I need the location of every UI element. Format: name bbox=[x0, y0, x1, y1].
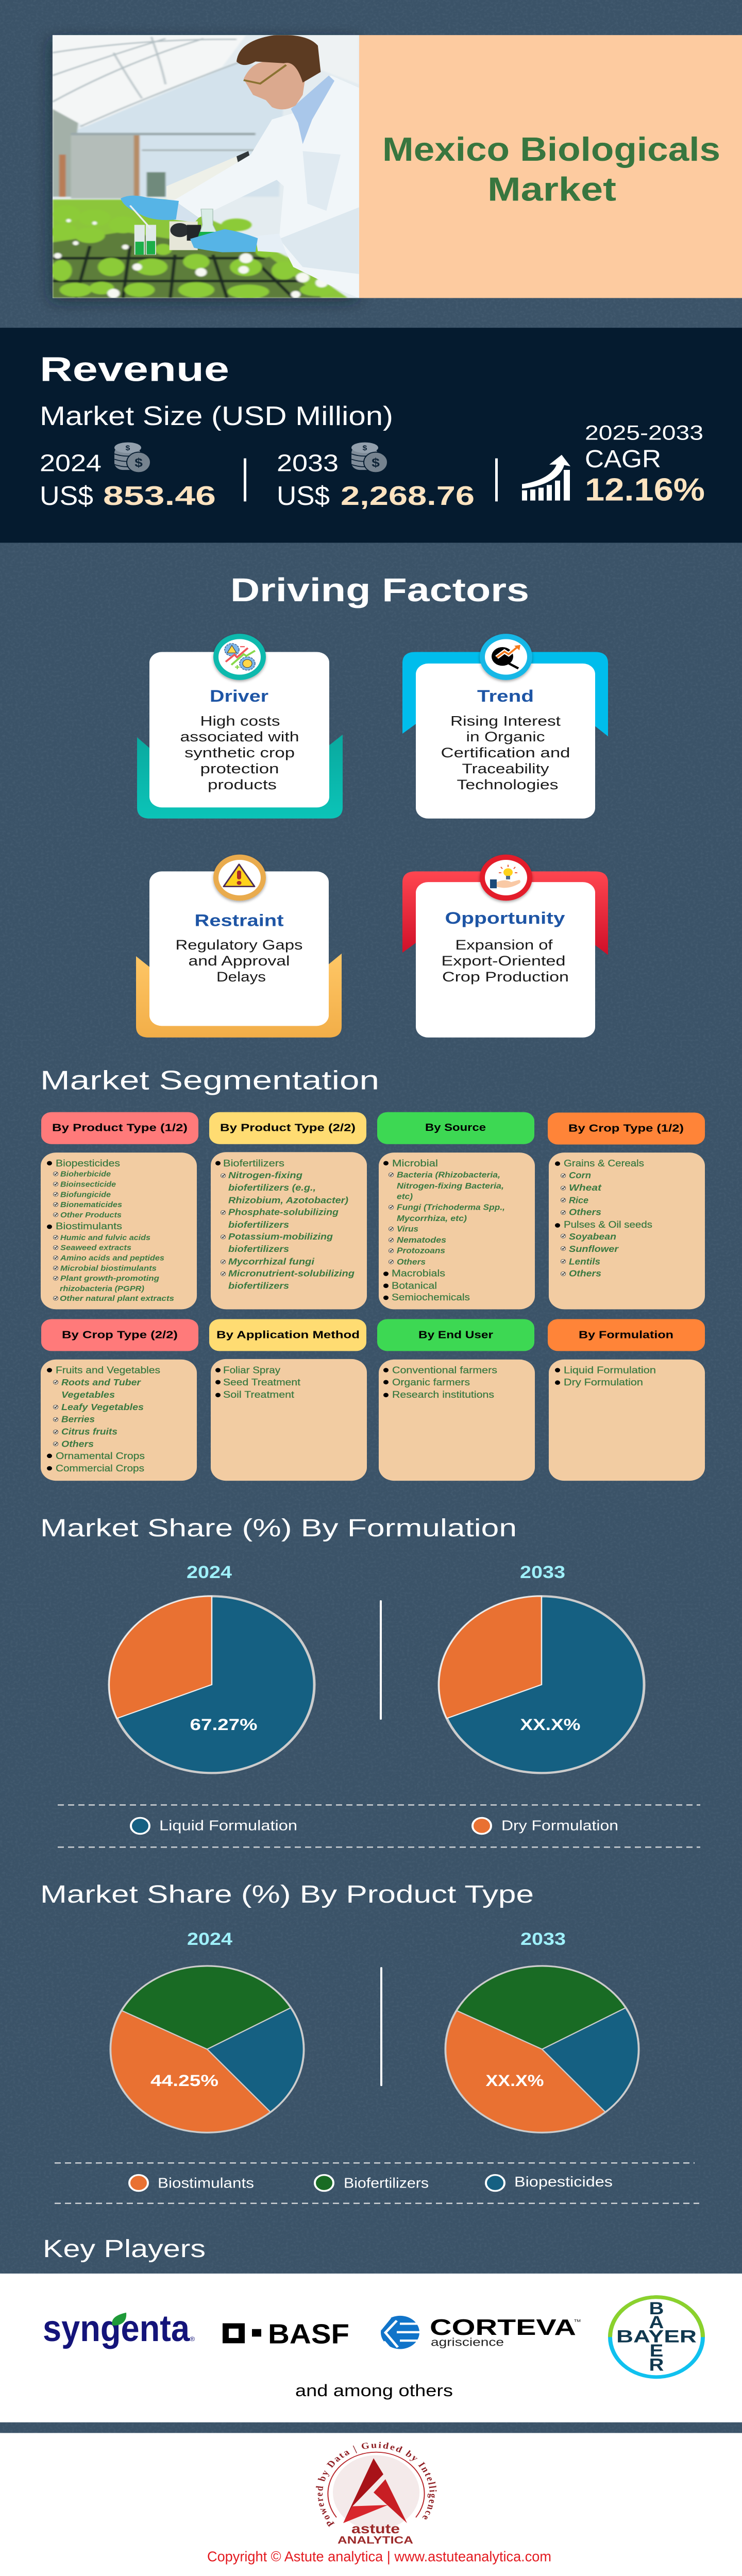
segment list: Ornamental Crops bbox=[56, 1451, 145, 1462]
2033 value: 2,268.76 bbox=[341, 481, 475, 511]
legend item: liquid: Liquid Formulation bbox=[159, 1818, 297, 1834]
icon: trend bbox=[480, 634, 532, 680]
segment list: Seaweed extracts bbox=[60, 1244, 131, 1252]
card text: Crop Production bbox=[442, 970, 569, 985]
card heading: Trend bbox=[477, 687, 534, 705]
segment list: Phosphate-solubilizing bbox=[228, 1207, 339, 1217]
pie chart: product type 2024 bbox=[111, 1929, 303, 2132]
CAGR: 12.16% bbox=[585, 472, 705, 507]
segment header: By Source bbox=[425, 1121, 486, 1133]
heading: key players: Key Players bbox=[43, 2235, 206, 2263]
segment: by product type 2/2 bbox=[209, 1112, 367, 1309]
segment header bbox=[209, 1319, 366, 1351]
segment header bbox=[377, 1319, 534, 1351]
segment list: Berries bbox=[61, 1414, 95, 1424]
segment list: Other Products bbox=[60, 1211, 122, 1219]
microscope bbox=[166, 156, 241, 199]
segment: by formulation bbox=[548, 1319, 705, 1481]
logo: corteva: CORTEVA bbox=[430, 2315, 576, 2340]
card text: Delays bbox=[216, 970, 266, 985]
segment list: Microbial biostimulants bbox=[60, 1264, 157, 1273]
segment: by end user bbox=[377, 1319, 535, 1481]
title: Market bbox=[487, 171, 616, 208]
segment list: Vegetables bbox=[61, 1389, 115, 1400]
CAGR bbox=[585, 421, 705, 507]
segment list: Nematodes bbox=[397, 1235, 446, 1245]
hero photo: scientist in greenhouse bbox=[50, 35, 359, 299]
segment header bbox=[209, 1112, 366, 1144]
segment list: Other natural plant extracts bbox=[60, 1295, 174, 1303]
test tubes and flask bbox=[134, 225, 145, 255]
logo: BASF: BASF bbox=[268, 2319, 349, 2349]
segment list: Grains & Cereals bbox=[564, 1158, 644, 1168]
segment list: Bioherbicide bbox=[60, 1171, 111, 1178]
year label: 2024 bbox=[187, 1562, 232, 1582]
segment list: Corn bbox=[569, 1170, 591, 1180]
segment header: By Crop Type (1/2) bbox=[568, 1122, 684, 1134]
segment header: By End User bbox=[418, 1329, 493, 1341]
logo: astute analytica: Powered by Data | Guided by Intelligence bbox=[315, 2442, 437, 2527]
legend item: biostimulants: Biostimulants bbox=[158, 2176, 254, 2191]
segment list: Others bbox=[397, 1257, 426, 1266]
segment list: Rice bbox=[569, 1195, 588, 1205]
segment list: Leafy Vegetables bbox=[61, 1402, 144, 1412]
icon: restraint bbox=[213, 855, 266, 901]
card text: Expansion of bbox=[456, 938, 553, 953]
divider bbox=[380, 1600, 382, 1720]
segment: by application method bbox=[209, 1319, 367, 1481]
segment list: Biostimulants bbox=[56, 1222, 122, 1232]
segment list bbox=[549, 1360, 705, 1481]
2033 value: US$ bbox=[277, 481, 330, 511]
key players band bbox=[0, 2274, 742, 2422]
card text bbox=[442, 938, 569, 985]
segment list: Semiochemicals bbox=[392, 1292, 470, 1303]
segment list bbox=[41, 1153, 197, 1309]
2024 value: US$ bbox=[40, 481, 93, 511]
copyright: Copyright © Astute analytica | www.astuteanalytica.com bbox=[207, 2549, 551, 2565]
legend item: dry: Dry Formulation bbox=[501, 1818, 618, 1834]
segment list: Wheat bbox=[569, 1183, 602, 1193]
segment list bbox=[211, 1359, 367, 1481]
legend: product type bbox=[55, 2163, 699, 2204]
heading: driving factors: Driving Factors bbox=[230, 571, 529, 608]
heading: market segmentation: Market Segmentation bbox=[40, 1065, 379, 1095]
card text: High costs bbox=[200, 714, 280, 729]
segment list: rhizobacteria (PGPR) bbox=[60, 1285, 144, 1293]
segment list: Bionematicides bbox=[60, 1201, 122, 1209]
card: opportunity bbox=[402, 855, 608, 1038]
segment header: By Crop Type (2/2) bbox=[62, 1329, 178, 1341]
segment: by product type 1/2 bbox=[41, 1112, 198, 1309]
card text bbox=[180, 714, 299, 792]
icon: coins 2033: $ bbox=[363, 444, 367, 452]
segment: by source bbox=[377, 1112, 535, 1309]
segment header: By Product Type (1/2) bbox=[52, 1122, 188, 1133]
card text: Export-Oriented bbox=[442, 954, 566, 969]
segment list: Microbial bbox=[392, 1158, 438, 1168]
segment list: Macrobials bbox=[392, 1268, 445, 1279]
market size label: Market Size (USD Million) bbox=[40, 401, 393, 431]
segment list: Conventional farmers bbox=[392, 1365, 497, 1376]
card text: protection bbox=[200, 761, 279, 776]
segment list: Pulses & Oil seeds bbox=[564, 1219, 652, 1230]
heading: market share by formulation: Market Share (%) By Formulation bbox=[40, 1514, 517, 1542]
segment list: Liquid Formulation bbox=[564, 1365, 656, 1376]
plant beds bbox=[53, 199, 348, 298]
pie chart: product type 2033 bbox=[446, 1929, 638, 2132]
segment list bbox=[549, 1153, 705, 1309]
icon: opportunity bbox=[480, 855, 532, 901]
icon: coins 2033: $ bbox=[372, 455, 380, 470]
card heading: Opportunity bbox=[445, 909, 565, 927]
footer band bbox=[0, 2433, 742, 2576]
legend: formulation bbox=[58, 1805, 700, 1847]
flask bbox=[196, 209, 222, 244]
segment header bbox=[41, 1319, 198, 1351]
segment list: Others bbox=[61, 1439, 94, 1449]
revenue heading: Revenue bbox=[40, 351, 229, 388]
card: restraint bbox=[136, 855, 342, 1038]
segment list: Mycorrhiza, etc) bbox=[397, 1214, 467, 1223]
icon: coins 2024 bbox=[114, 443, 150, 472]
separator bbox=[244, 459, 246, 501]
segment list: biofertilizers bbox=[228, 1219, 289, 1229]
text: and among others: and among others bbox=[295, 2381, 453, 2400]
card: driver bbox=[137, 634, 343, 819]
segment header bbox=[377, 1112, 534, 1144]
segment list: Mycorrhizal fungi bbox=[228, 1257, 315, 1266]
card heading: Driver bbox=[210, 687, 268, 705]
logo: bayer: A bbox=[649, 2312, 664, 2332]
card text: Traceability bbox=[462, 761, 549, 776]
segment list: Micronutrient-solubilizing bbox=[228, 1268, 355, 1278]
card text: Certification and bbox=[441, 745, 570, 760]
pie chart: formulation 2024 bbox=[109, 1562, 314, 1773]
icon: coins 2024: $ bbox=[126, 444, 130, 452]
card text: Rising Interest bbox=[450, 714, 561, 729]
title bbox=[382, 131, 720, 208]
segment list: Others bbox=[569, 1268, 601, 1278]
CAGR: 2025-2033 bbox=[585, 421, 703, 445]
CAGR: CAGR bbox=[585, 445, 661, 473]
segment list: Soyabean bbox=[569, 1231, 616, 1242]
logo: corteva: TM bbox=[574, 2318, 581, 2323]
segment header bbox=[548, 1319, 705, 1351]
segment list bbox=[211, 1152, 367, 1309]
segment list: Virus bbox=[397, 1225, 418, 1233]
segment list: Fruits and Vegetables bbox=[56, 1365, 160, 1376]
segment list: Fungi (Trichoderma Spp., bbox=[397, 1202, 505, 1212]
year label: 2024 bbox=[187, 1929, 232, 1948]
segment list: Rhizobium, Azotobacter) bbox=[228, 1195, 348, 1205]
segment list: Soil Treatment bbox=[223, 1389, 295, 1400]
segment list: Bacteria (Rhizobacteria, bbox=[397, 1170, 500, 1179]
segment list: Nitrogen-fixing Bacteria, bbox=[397, 1181, 504, 1191]
segment list bbox=[379, 1360, 535, 1481]
segment list: Organic farmers bbox=[392, 1377, 470, 1387]
logo: corteva: agriscience bbox=[431, 2336, 504, 2349]
segment list: etc) bbox=[397, 1192, 413, 1201]
card text: products bbox=[208, 777, 277, 792]
icon: driver bbox=[213, 634, 266, 680]
segment list: Sunflower bbox=[569, 1244, 619, 1254]
card text: Regulatory Gaps bbox=[176, 938, 303, 953]
segment list: Biopesticides bbox=[56, 1158, 120, 1168]
segment list bbox=[41, 1360, 197, 1481]
logo: bayer: E bbox=[650, 2341, 663, 2361]
segment list: Botanical bbox=[392, 1281, 437, 1291]
segment: by crop type 1/2 bbox=[548, 1112, 705, 1309]
gloves bbox=[121, 196, 179, 220]
segment list: biofertilizers (e.g., bbox=[228, 1183, 316, 1193]
2033 value: 2033 bbox=[277, 449, 339, 477]
value: XX.X% bbox=[485, 2072, 544, 2090]
legend item: biopesticides: Biopesticides bbox=[514, 2174, 613, 2190]
segment list: Protozoans bbox=[397, 1246, 445, 1255]
legend item: biofertilizers: Biofertilizers bbox=[344, 2176, 429, 2191]
logo: astute analytica: astute bbox=[351, 2521, 400, 2536]
lab coat bbox=[174, 76, 359, 298]
logo: syngenta: ® bbox=[190, 2335, 195, 2343]
segment list: Dry Formulation bbox=[564, 1377, 643, 1387]
segment header bbox=[548, 1112, 705, 1145]
value: 44.25% bbox=[150, 2072, 218, 2090]
value: 67.27% bbox=[190, 1716, 258, 1734]
segment list: Commercial Crops bbox=[56, 1463, 144, 1474]
card text: synthetic crop bbox=[184, 745, 295, 760]
hero banner bbox=[50, 35, 742, 299]
segment list: Plant growth-promoting bbox=[60, 1275, 159, 1283]
card heading: Restraint bbox=[194, 911, 284, 930]
segment header: By Product Type (2/2) bbox=[220, 1122, 356, 1133]
segment list: Others bbox=[569, 1207, 601, 1217]
card text bbox=[441, 714, 570, 792]
segment list bbox=[379, 1153, 535, 1309]
2024 value bbox=[40, 449, 216, 511]
segment list: Bioinsecticide bbox=[60, 1180, 116, 1189]
year label: 2033 bbox=[520, 1929, 566, 1948]
segment list: biofertilizers bbox=[228, 1244, 289, 1254]
segment list: Roots and Tuber bbox=[61, 1377, 142, 1387]
logo: bayer: B bbox=[649, 2298, 664, 2318]
logo: syngenta: syngenta bbox=[43, 2307, 190, 2349]
head and hair bbox=[244, 61, 308, 109]
segment list: Biofungicide bbox=[60, 1191, 111, 1199]
segment list: Citrus fruits bbox=[61, 1427, 117, 1436]
segment header: By Formulation bbox=[579, 1329, 673, 1341]
icon: coins 2024: $ bbox=[134, 455, 143, 470]
segment list: Seed Treatment bbox=[223, 1377, 301, 1387]
2024 value: 853.46 bbox=[103, 481, 216, 511]
segment list: Lentils bbox=[569, 1257, 600, 1266]
year label: 2033 bbox=[520, 1562, 565, 1582]
segment list: Research institutions bbox=[392, 1389, 494, 1400]
title: Mexico Biologicals bbox=[382, 131, 720, 168]
separator bbox=[495, 459, 498, 501]
peach title panel bbox=[359, 35, 742, 298]
card text: associated with bbox=[180, 730, 299, 744]
card text bbox=[176, 938, 303, 985]
segment list: Foliar Spray bbox=[223, 1365, 280, 1376]
card text: in Organic bbox=[466, 730, 545, 744]
divider bbox=[380, 1967, 382, 2086]
icon: coins 2033 bbox=[351, 443, 387, 472]
value: XX.X% bbox=[520, 1716, 581, 1734]
segment: by crop type 2/2 bbox=[41, 1319, 198, 1481]
card text: Technologies bbox=[457, 777, 558, 792]
segment list: Potassium-mobilizing bbox=[228, 1231, 333, 1242]
segment list: biofertilizers bbox=[228, 1281, 289, 1291]
segment list: Humic and fulvic acids bbox=[60, 1234, 150, 1242]
logo: bayer: R bbox=[649, 2354, 664, 2375]
heading: market share by product type: Market Share (%) By Product Type bbox=[40, 1881, 534, 1908]
legend item: biofertilizers bbox=[315, 2175, 429, 2191]
segment header bbox=[41, 1112, 198, 1144]
icon: growth arrow bbox=[522, 455, 570, 501]
2033 value bbox=[277, 449, 475, 511]
card text: and Approval bbox=[189, 954, 290, 969]
logo: BASF bbox=[223, 2319, 349, 2349]
2024 value: 2024 bbox=[40, 449, 102, 477]
pie chart: formulation 2033 bbox=[439, 1562, 644, 1773]
segment list: Amino acids and peptides bbox=[60, 1255, 164, 1262]
segment list: Nitrogen-fixing bbox=[228, 1170, 303, 1180]
logo: bayer bbox=[610, 2297, 703, 2377]
segment header: By Application Method bbox=[216, 1329, 360, 1341]
logo: astute analytica: ANALYTICA bbox=[338, 2534, 413, 2546]
logo: bayer: BAYER bbox=[616, 2326, 697, 2346]
shirt bbox=[291, 76, 334, 144]
card: trend bbox=[402, 634, 608, 819]
logo: corteva bbox=[380, 2315, 581, 2350]
segment list: Biofertilizers bbox=[223, 1158, 284, 1168]
revenue panel bbox=[0, 328, 742, 543]
